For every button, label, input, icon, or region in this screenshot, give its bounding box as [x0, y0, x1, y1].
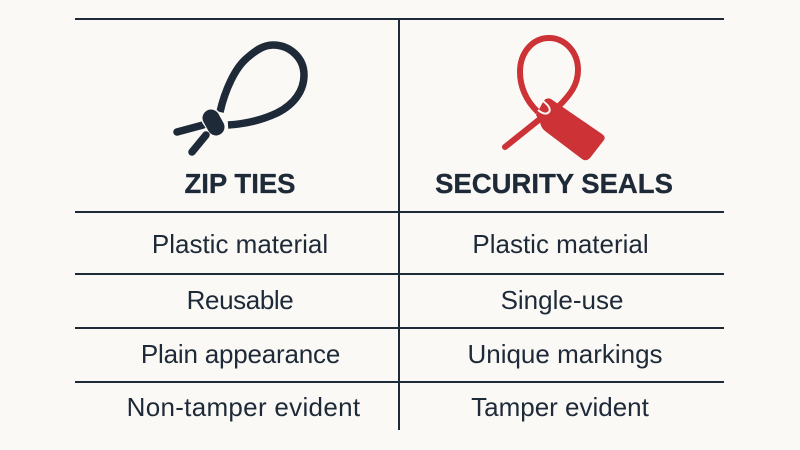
- row 2 left: Reusable: [187, 285, 293, 315]
- heading: security seals: SECURITY SEALS: [435, 168, 673, 199]
- row 3 left: Plain appearance: [141, 339, 340, 369]
- row 4 left: Non-tamper evident: [127, 392, 360, 422]
- row 4 right: Tamper evident: [471, 392, 649, 422]
- icon: security seal: [502, 35, 605, 160]
- row 1 left: Plastic material: [152, 229, 328, 259]
- row 1 right: Plastic material: [472, 229, 649, 259]
- icon: zip tie: [173, 41, 308, 156]
- heading: zip ties: ZIP TIES: [184, 168, 296, 199]
- row 3 right: Unique markings: [467, 339, 663, 369]
- row 2 right: Single-use: [501, 285, 623, 315]
